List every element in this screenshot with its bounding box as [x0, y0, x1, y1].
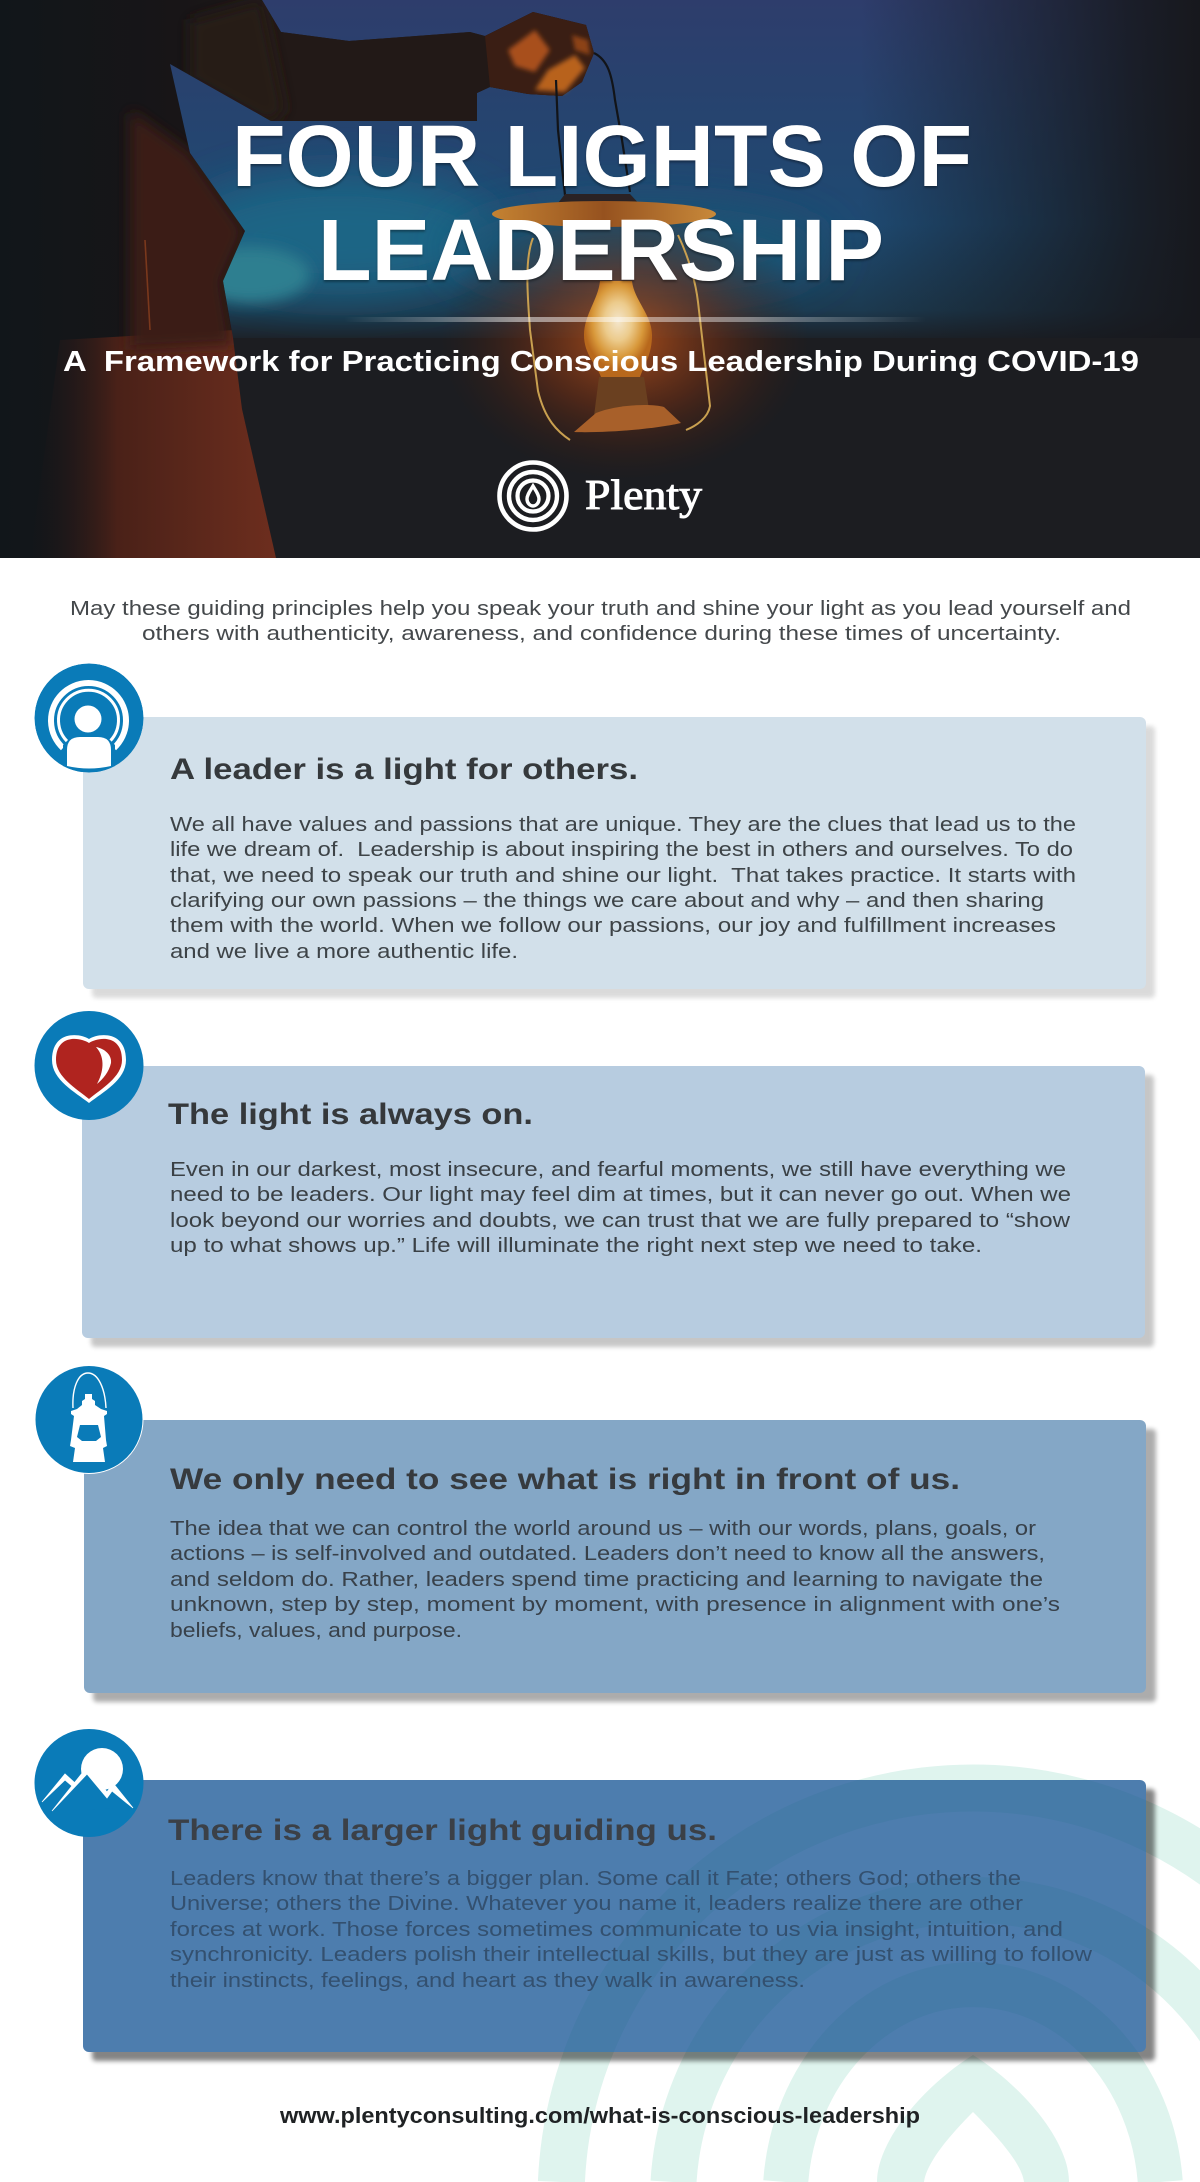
icon: lantern	[35, 1366, 143, 1474]
body text: them with the world. When we follow our passions, our joy and fulfillment increases	[170, 915, 1056, 937]
body text: life we dream of. Leadership is about inspiring the best in others and ourselves. To do	[170, 839, 1073, 861]
body text: that, we need to speak our truth and shine our light. That takes practice. It starts with	[170, 865, 1076, 887]
panel: we only need to see what is right in front of us	[35, 1366, 1156, 1702]
panel: there is a larger light guiding us	[34, 1729, 1158, 2064]
body text: beliefs, values, and purpose.	[170, 1620, 462, 1642]
intro text	[70, 598, 1131, 645]
body text: We all have values and passions that are unique. They are the clues that lead us to the	[170, 814, 1076, 836]
panel: the light is always on	[34, 1011, 1154, 1347]
person silhouette	[0, 0, 602, 558]
lantern glow	[463, 222, 786, 460]
Plenty logo	[500, 462, 702, 530]
heading: We only need to see what is right in front of us.	[170, 1463, 960, 1496]
body text: Leaders know that there’s a bigger plan. Some call it Fate; others God; others the	[170, 1868, 1021, 1890]
body text: The idea that we can control the world around us – with our words, plans, goals, or	[170, 1518, 1036, 1540]
body text: forces at work. Those forces sometimes communicate to us via insight, intuition, and	[170, 1919, 1063, 1941]
body text: unknown, step by step, moment by moment, with presence in alignment with one’s	[170, 1594, 1060, 1616]
body text: Universe; others the Divine. Whatever you name it, leaders realize there are other	[170, 1893, 1023, 1915]
title	[237, 125, 970, 284]
title: FOUR LIGHTS OF	[232, 108, 972, 205]
heading: There is a larger light guiding us.	[168, 1814, 717, 1847]
body text	[170, 1159, 1071, 1257]
icon: person with light rings	[34, 664, 144, 772]
Plenty logo: Plenty	[585, 473, 702, 519]
night sky	[170, 0, 1136, 338]
body text: and seldom do. Rather, leaders spend time practicing and learning to navigate the	[170, 1569, 1043, 1591]
body text	[170, 1868, 1093, 1992]
subtitle: A Framework for Practicing Conscious Leadership During COVID-19	[63, 346, 1139, 378]
body text: synchronicity. Leaders polish their intellectual skills, but they are just as willing to follow	[170, 1944, 1093, 1966]
lantern	[492, 53, 716, 440]
divider glow	[344, 317, 926, 322]
body text: Even in our darkest, most insecure, and fearful moments, we still have everything we	[170, 1159, 1066, 1181]
heading: A leader is a light for others.	[170, 753, 638, 786]
intro text: May these guiding principles help you speak your truth and shine your light as you lead yourself and	[70, 598, 1131, 620]
heading: The light is always on.	[168, 1098, 533, 1131]
body text	[170, 1518, 1060, 1642]
body text: actions – is self-involved and outdated. Leaders don’t need to know all the answers,	[170, 1543, 1045, 1565]
hand	[485, 12, 594, 96]
body text: clarifying our own passions – the things we care about and why – and then sharing	[170, 890, 1044, 912]
decorative drop-logo arcs	[561, 1788, 1200, 2182]
icon: mountains and moon	[34, 1729, 144, 1837]
panel: a leader is a light for others	[34, 664, 1155, 998]
icon: heart	[34, 1011, 144, 1120]
arcs showing through the panel	[561, 1788, 1200, 2182]
title: LEADERSHIP	[318, 202, 884, 299]
hero banner with lantern photo	[0, 0, 1200, 558]
body text	[170, 814, 1076, 963]
body text: and we live a more authentic life.	[170, 941, 518, 963]
body text: look beyond our worries and doubts, we can trust that we are fully prepared to “show	[170, 1210, 1071, 1232]
intro text: others with authenticity, awareness, and confidence during these times of uncertainty.	[142, 623, 1061, 645]
footer url: www.plentyconsulting.com/what-is-conscious-leadership	[279, 2103, 920, 2128]
body text: their instincts, feelings, and heart as they walk in awareness.	[170, 1970, 805, 1992]
body text: need to be leaders. Our light may feel dim at times, but it can never go out. When we	[170, 1184, 1071, 1206]
body text: up to what shows up.” Life will illuminate the right next step we need to take.	[170, 1235, 982, 1257]
